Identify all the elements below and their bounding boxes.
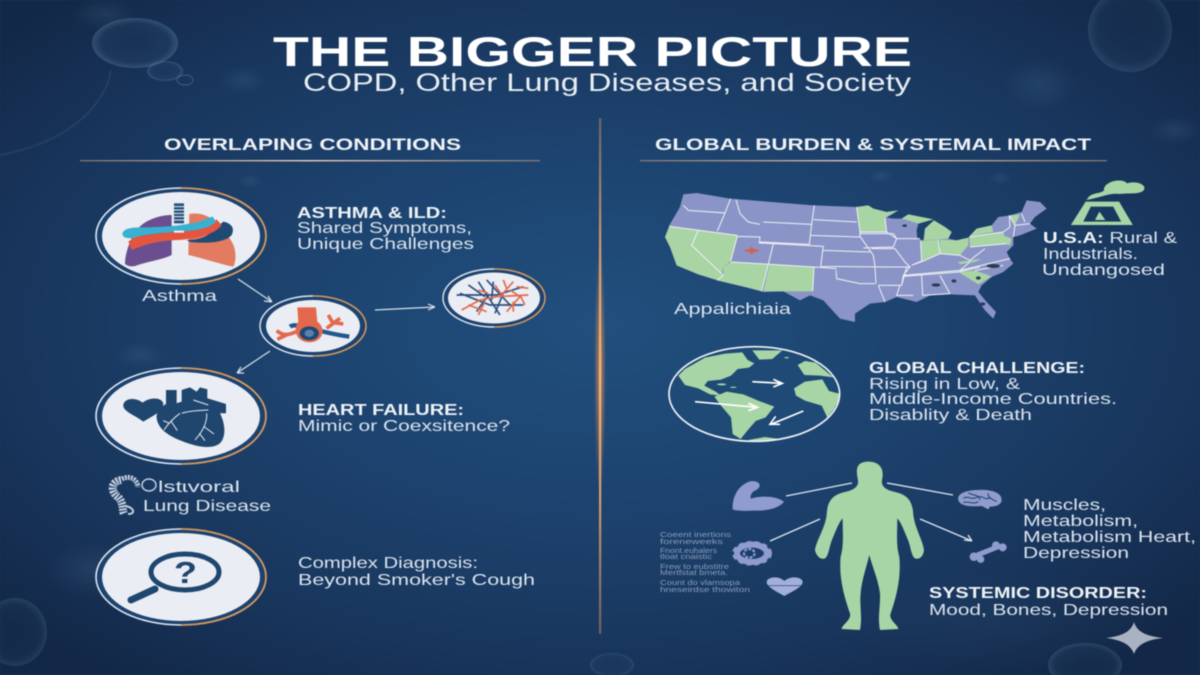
- icon: factory smoke: [1071, 181, 1144, 225]
- small legend text: Coeent inertions: [660, 532, 732, 539]
- arrow: airway to tissue: [375, 304, 435, 310]
- icon: globe: [669, 347, 842, 445]
- right heading: GLOBAL BURDEN & SYSTEMAL IMPACT: [655, 135, 1092, 154]
- icon: brain: [958, 490, 1002, 509]
- icon: small heart: [767, 577, 803, 596]
- text: global challenge: Middle-Income Countries.: [869, 391, 1117, 408]
- center divider: [594, 118, 606, 634]
- small legend text: hneseirdse thowiton: [660, 587, 750, 594]
- label: obstructive lung disease: Lung Disease: [143, 498, 271, 515]
- body figure: [815, 462, 924, 630]
- label: obstructive lung disease: lstɩvoral: [158, 479, 240, 496]
- text: usa: Industrials.: [1043, 246, 1138, 263]
- text: systemic disorder: SYSTEMIC DISORDER:: [929, 585, 1147, 602]
- connector lines: [770, 483, 972, 541]
- map: USA: [665, 193, 1047, 322]
- icon: airway coil: [113, 477, 156, 514]
- small legend text: tloat cnaistic: [660, 554, 713, 561]
- text: systemic disorder: [929, 585, 1168, 619]
- panel: overlapping conditions: [80, 135, 545, 625]
- text: asthma and ILD: ASTHMA & ILD:: [297, 205, 447, 222]
- icon: lungs: [96, 188, 266, 284]
- small legend text: Count do vlamsopa: [660, 580, 740, 587]
- icon: lung tissue: [443, 269, 545, 327]
- small legend text: foreneweeks: [660, 539, 724, 546]
- text: heart failure: Mimic or Coexsitence?: [298, 418, 510, 435]
- arrow: asthma to airway: [238, 279, 272, 302]
- text: systemic disorder: Mood, Bones, Depression: [929, 602, 1168, 619]
- text: global challenge: [869, 360, 1117, 424]
- small legend text: Frew to eubstitre: [660, 564, 729, 571]
- text: complex diagnosis: Beyond Smoker's Cough: [298, 572, 535, 589]
- text: asthma and ILD: [297, 205, 474, 253]
- icon: gear: [734, 543, 770, 564]
- text: muscles: Metabolism,: [1023, 513, 1138, 530]
- text: complex diagnosis: [298, 555, 535, 589]
- small legend text: [660, 532, 750, 594]
- text: muscles: [1023, 497, 1196, 562]
- label: obstructive lung disease: [143, 479, 271, 515]
- text: global challenge: Rising in Low, &: [869, 376, 1020, 393]
- text: complex diagnosis: Complex Diagnosis:: [298, 555, 478, 572]
- text: muscles: Metabolism Heart,: [1023, 529, 1196, 546]
- icon: muscle: [733, 481, 784, 511]
- text: global challenge: Disablity & Death: [869, 407, 1032, 424]
- small legend text: Fnont.euhalers: [660, 548, 718, 555]
- subtitle: COPD, Other Lung Diseases, and Society: [303, 69, 912, 97]
- label: asthma: Asthma: [142, 288, 217, 305]
- text: usa: Undangosed: [1042, 262, 1165, 279]
- text: usa: [1042, 230, 1177, 279]
- text: muscles: Depression: [1023, 545, 1129, 562]
- panel: global burden: [640, 135, 1196, 630]
- text: asthma and ILD: Unique Challenges: [297, 236, 474, 253]
- text: muscles: Muscles,: [1023, 497, 1106, 514]
- text: asthma and ILD: Shared Symptoms,: [297, 220, 472, 237]
- icon: airway: [260, 296, 366, 356]
- arrows on globe: [695, 379, 803, 424]
- icon: magnifier: [96, 529, 266, 625]
- text: heart failure: HEART FAILURE:: [298, 402, 464, 419]
- arrow: airway to heart: [237, 351, 270, 373]
- left heading: OVERLAPING CONDITIONS: [164, 135, 461, 154]
- title: THE BIGGER PICTURE: [273, 28, 912, 75]
- icon: sparkle: [1106, 622, 1163, 654]
- label: appalachia: Appalichiaia: [674, 301, 791, 318]
- text: heart failure: [298, 402, 510, 435]
- icon: heart: [96, 368, 266, 464]
- small legend text: Mertfstat bmeta.: [660, 570, 728, 577]
- text: global challenge: GLOBAL CHALLENGE:: [869, 360, 1085, 377]
- text: usa: U.S.A: Rural &: [1043, 230, 1177, 247]
- icon: magnifier: ?: [174, 555, 197, 590]
- icon: bone: [970, 541, 1007, 563]
